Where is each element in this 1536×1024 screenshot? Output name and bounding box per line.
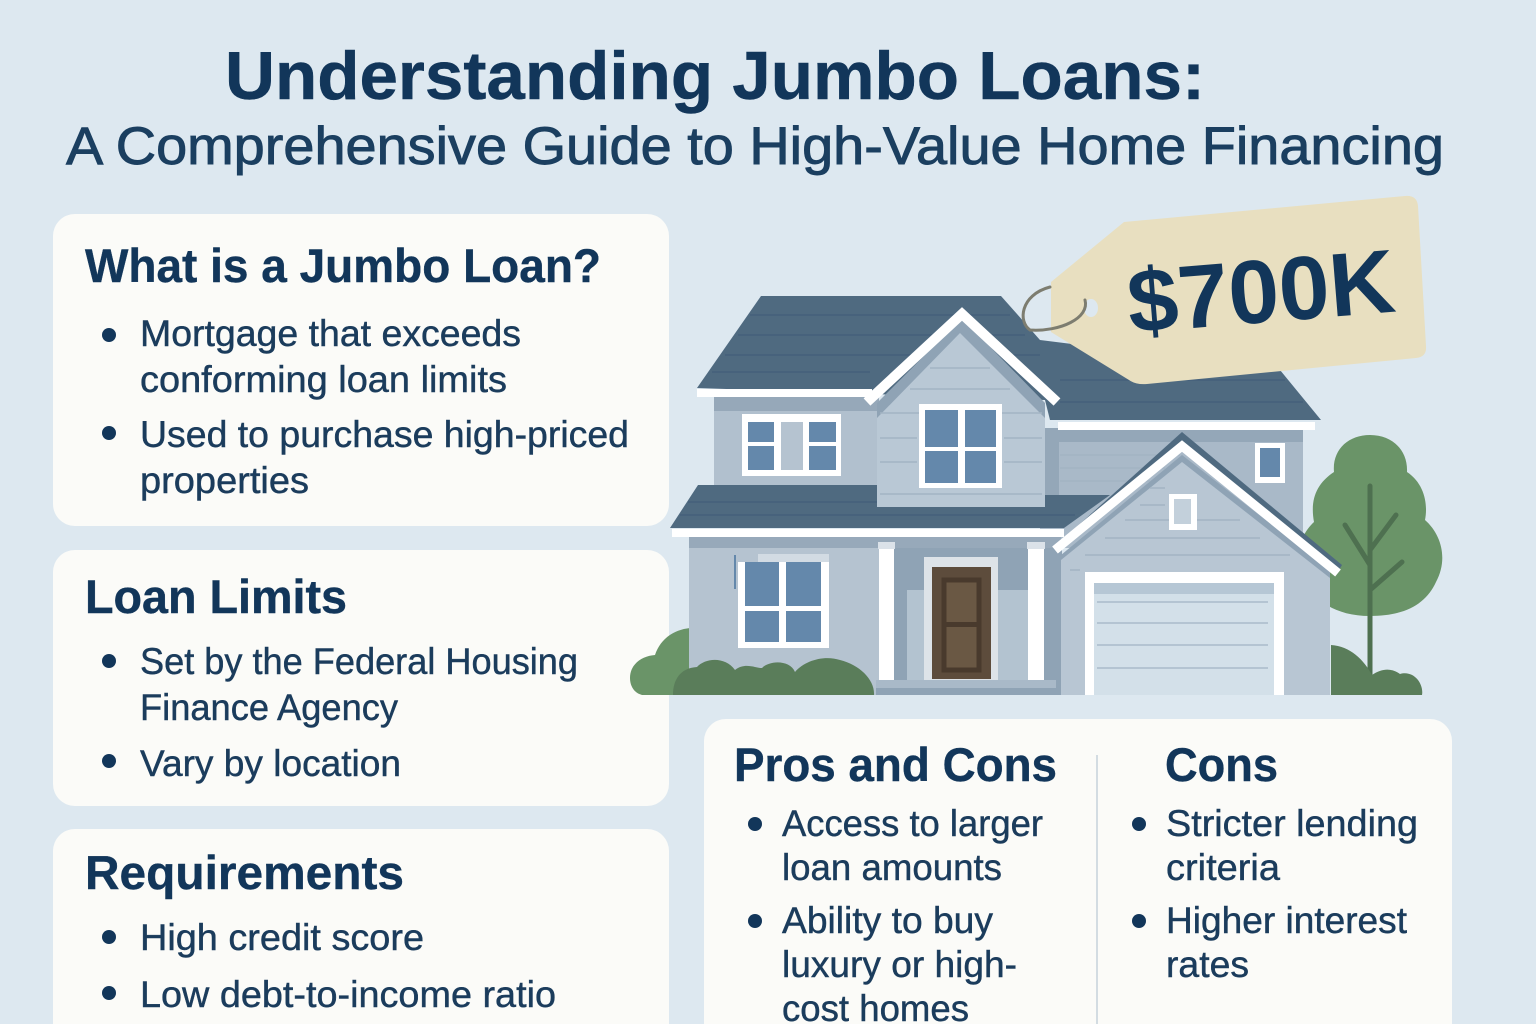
bullet: high-priced properties: properties <box>140 460 309 501</box>
front bushes <box>673 658 874 695</box>
center gable <box>867 314 1057 507</box>
bullet: luxury homes: Ability to buy <box>782 900 993 941</box>
heading: requirements: Requirements <box>85 846 404 899</box>
lower roof <box>670 485 1110 528</box>
price text: $700K <box>1124 232 1399 353</box>
bullet: larger loan amounts: loan amounts <box>782 847 1002 888</box>
porch eave <box>672 529 1064 537</box>
panel: requirements <box>53 829 669 1024</box>
bullet: higher interest: Higher interest <box>1166 900 1408 941</box>
front door <box>924 557 998 680</box>
tag string <box>1023 287 1086 330</box>
heading: what is a jumbo loan: What is a Jumbo Loan? <box>85 239 601 292</box>
right upper wall <box>1040 428 1303 548</box>
bullet: stricter lending: criteria <box>1166 847 1280 888</box>
bullet: federal housing finance agency: Finance Agency <box>140 687 398 728</box>
bullet: mortgage exceeds limits: conforming loan limits <box>140 359 507 400</box>
tag hole <box>1084 299 1098 317</box>
panel: pros and cons <box>704 719 1452 1024</box>
price tag <box>1023 196 1426 384</box>
bullet: federal housing finance agency <box>102 641 578 728</box>
subtitle: A Comprehensive Guide to High-Value Home Financing <box>66 117 1444 176</box>
heading: pros and cons: Pros and Cons <box>734 738 1057 791</box>
left eave <box>697 389 872 397</box>
upper roof <box>697 296 1321 420</box>
gable vent <box>1169 494 1197 530</box>
panel: what is a jumbo loan <box>53 214 669 526</box>
garage gable <box>1055 432 1342 695</box>
lower left window <box>734 554 829 648</box>
bullet: higher interest: rates <box>1166 944 1249 985</box>
bullet: high-priced properties <box>102 414 629 501</box>
bullet: luxury homes <box>748 900 1017 1024</box>
bullet: federal housing finance agency: Set by the Federal Housing <box>140 641 578 682</box>
bullet: luxury homes: luxury or high- <box>782 944 1017 985</box>
bullet: larger loan amounts <box>748 803 1043 888</box>
bullet: high-priced properties: Used to purchase high-priced <box>140 414 629 455</box>
porch columns <box>878 542 1045 680</box>
heading: cons: Cons <box>1165 738 1278 791</box>
bullet: larger loan amounts: Access to larger <box>782 803 1043 844</box>
upper left wall <box>714 397 879 489</box>
bullet: vary by location: Vary by location <box>140 743 401 784</box>
bullet: mortgage exceeds limits: Mortgage that exceeds <box>140 313 521 354</box>
right bush <box>1331 645 1422 695</box>
bullet: mortgage exceeds limits <box>102 313 521 400</box>
bullet: higher interest <box>1132 900 1408 985</box>
bullet: high credit score: High credit score <box>140 917 424 958</box>
bullet: stricter lending: Stricter lending <box>1166 803 1418 844</box>
small side window <box>1255 443 1285 483</box>
title: Understanding Jumbo Loans: <box>225 38 1205 114</box>
bullet: stricter lending <box>1132 803 1418 888</box>
heading: loan limits: Loan Limits <box>85 570 347 623</box>
lower wall <box>689 537 1062 695</box>
divider <box>1096 755 1098 1024</box>
illustration: house <box>630 296 1442 695</box>
panel: loan limits <box>53 550 669 806</box>
upper left window <box>742 414 841 476</box>
garage door <box>1085 572 1284 695</box>
tree <box>1299 435 1442 690</box>
left back bush <box>630 628 690 695</box>
right eave <box>1058 422 1315 430</box>
porch step <box>876 680 1062 695</box>
bullet: low debt-to-income: Low debt-to-income ratio <box>140 974 556 1015</box>
center window <box>919 404 1002 488</box>
